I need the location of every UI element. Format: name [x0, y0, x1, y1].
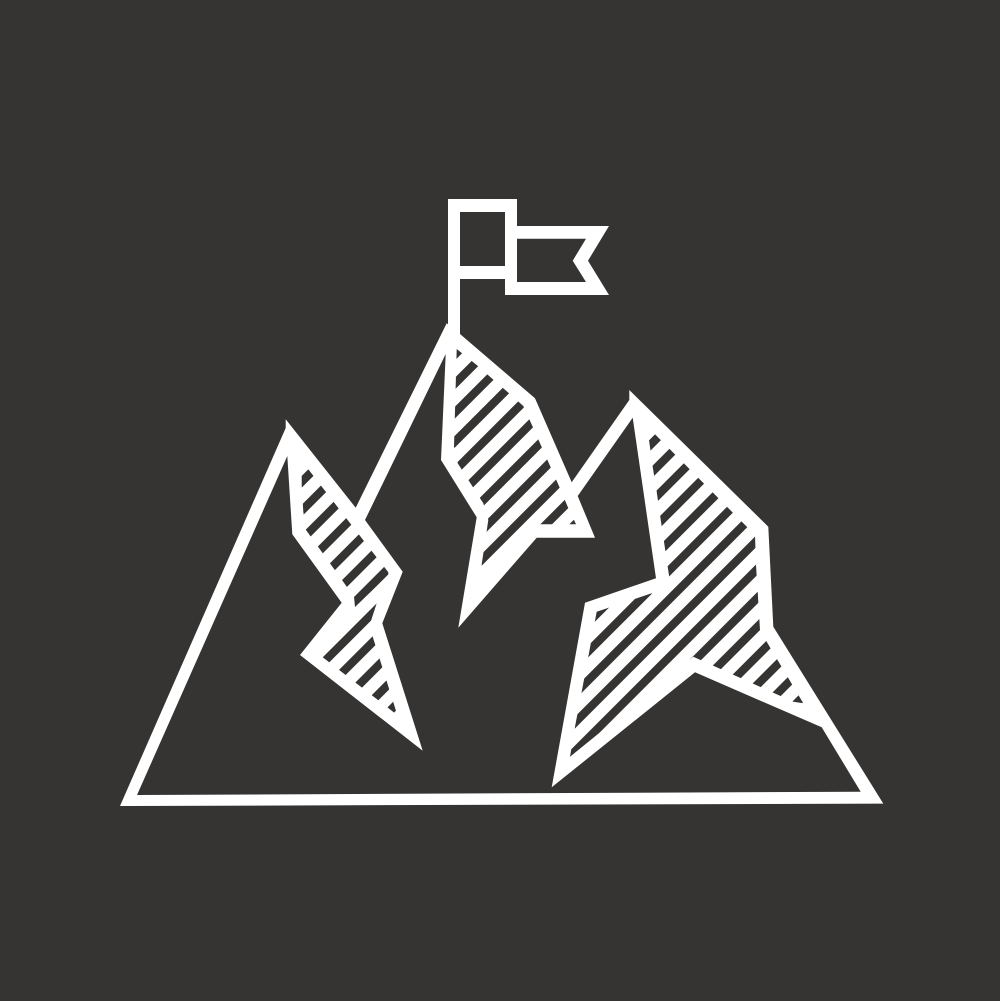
- hatching: left peak lower shadow: [322, 603, 396, 712]
- mountain outline silhouette: [120, 323, 883, 806]
- hatching: right peak shadow: [570, 434, 803, 757]
- hatching: central peak shadow: [454, 349, 576, 566]
- illustration: mountain peak with flag: [120, 199, 884, 806]
- flag and pole: [448, 199, 609, 340]
- hatching: left peak upper shadow: [302, 469, 388, 607]
